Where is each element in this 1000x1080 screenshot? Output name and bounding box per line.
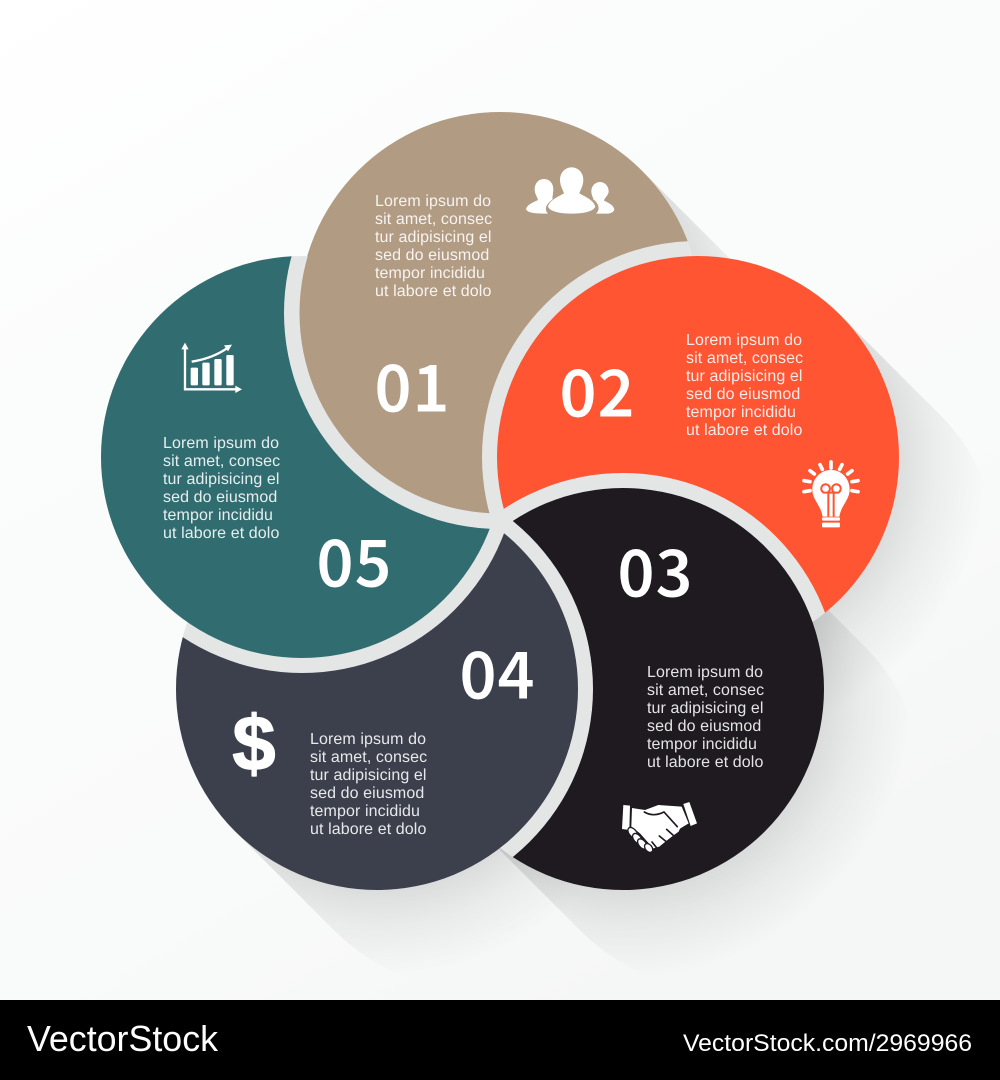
watermark bar xyxy=(0,1000,1000,1080)
long shadows xyxy=(377,313,798,789)
text block 01: ut labore et dolo xyxy=(375,283,491,300)
text block 03: ut labore et dolo xyxy=(647,754,763,771)
text block 02: tur adipisicing el xyxy=(686,368,803,385)
text block 04: sed do eiusmod xyxy=(310,785,424,802)
text block 01: sit amet, consec xyxy=(375,211,492,228)
text block 02: sit amet, consec xyxy=(686,350,803,367)
text block 04: Lorem ipsum do xyxy=(310,731,426,748)
text block 05: sed do eiusmod xyxy=(163,489,277,506)
panel 04 slate circle xyxy=(176,488,578,890)
icon: handshake xyxy=(622,802,697,854)
text block 01: Lorem ipsum do xyxy=(375,193,491,210)
text block 04: tur adipisicing el xyxy=(310,767,427,784)
text block 02: sed do eiusmod xyxy=(686,386,800,403)
text block 05: tempor incididu xyxy=(163,507,273,524)
icon: people xyxy=(526,167,614,214)
text block 02: Lorem ipsum do xyxy=(686,332,802,349)
text block 01: tempor incididu xyxy=(375,265,485,282)
icon: bar chart xyxy=(181,343,242,393)
text block 05: ut labore et dolo xyxy=(163,525,279,542)
icon: light bulb xyxy=(804,462,858,527)
number 04: 04 xyxy=(459,623,535,719)
text block 03: Lorem ipsum do xyxy=(647,664,763,681)
icon: dollar sign: $ xyxy=(232,699,276,787)
text block 03: tempor incididu xyxy=(647,736,757,753)
watermark bar: VectorStock.com/2969966 xyxy=(683,1030,972,1057)
text block 04: sit amet, consec xyxy=(310,749,427,766)
panel 01 brown circle xyxy=(299,112,701,514)
text block 03: tur adipisicing el xyxy=(647,700,764,717)
text block 02: tempor incididu xyxy=(686,404,796,421)
centre junction xyxy=(489,508,511,530)
text block 03: sit amet, consec xyxy=(647,682,764,699)
number 01: 01 xyxy=(374,336,450,432)
panel 03 black circle xyxy=(500,488,824,890)
number 03: 03 xyxy=(617,521,693,617)
text block 01: sed do eiusmod xyxy=(375,247,489,264)
text block 04: tempor incididu xyxy=(310,803,420,820)
panel 05 teal circle xyxy=(101,256,503,658)
text block 02: ut labore et dolo xyxy=(686,422,802,439)
text block 04: ut labore et dolo xyxy=(310,821,426,838)
watermark bar: VectorStock xyxy=(27,1018,219,1059)
text block 05: Lorem ipsum do xyxy=(163,435,279,452)
number 05: 05 xyxy=(316,511,392,607)
number 02: 02 xyxy=(559,341,635,437)
text block 01: tur adipisicing el xyxy=(375,229,492,246)
text block 05: tur adipisicing el xyxy=(163,471,280,488)
panel 02 orange circle xyxy=(497,256,899,658)
text block 05: sit amet, consec xyxy=(163,453,280,470)
text block 03: sed do eiusmod xyxy=(647,718,761,735)
